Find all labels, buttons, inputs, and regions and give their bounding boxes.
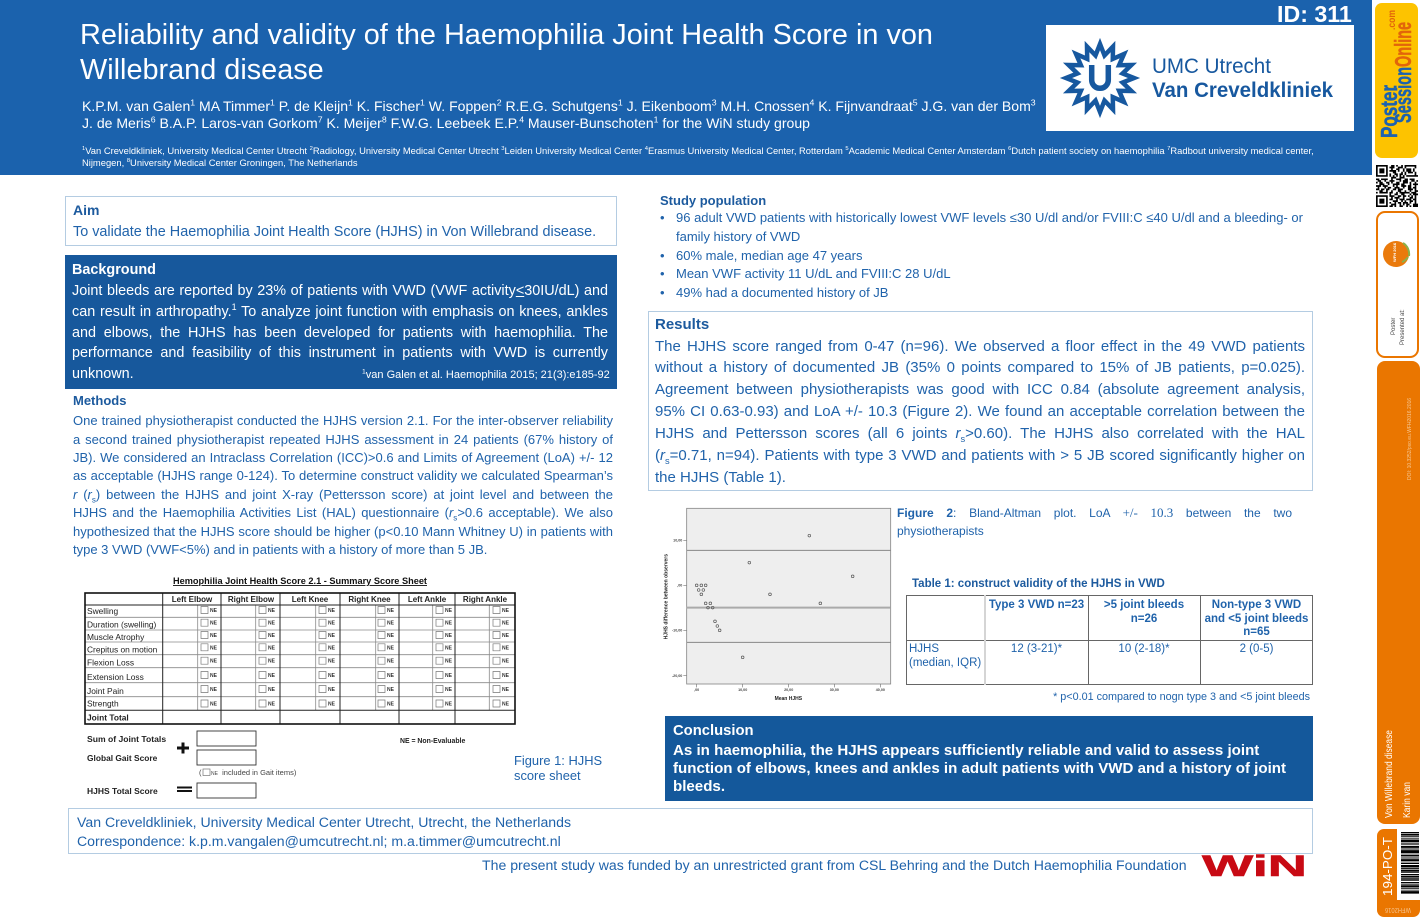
axis tick labels [672,539,885,692]
NE checkboxes: NE [328,702,336,708]
icon: congress logo [1383,241,1409,267]
panel: results: Agreement between physiotherapists was good with ICC 0.84 (absolute agreement analysis, [655,380,1305,398]
panel: results: (rs=0.71, n=94). Patients with type 3 VWD and patients with > 5 JB scored significantly higher on [655,446,1305,466]
panel: background: Joint bleeds are reported by 23% of patients with VWD (VWF activity<30IU/dL) and [72,282,608,298]
score totals: NE included in Gait items) [211,768,297,777]
logo: PosterSessionOnline: Poster [1376,85,1402,138]
NE checkboxes: NE [502,645,510,651]
panel: methods: a second trained physiotherapist repeated HJHS assessment in 24 patients (67% history of [73,432,613,447]
NE checkboxes: NE [387,645,395,651]
affiliations: Nijmegen, 8University Medical Center Groningen, The Netherlands [82,157,358,168]
NE checkboxes: NE [445,645,453,651]
affiliations [82,145,1314,168]
table headers: Type 3 VWD n=23 [989,599,1084,611]
panel: study population: • [660,266,665,281]
NE checkboxes: NE [387,633,395,639]
NE checkboxes: NE [268,645,276,651]
panel: methods: r (rs) between the HJHS and joint X-ray (Pettersson score) at joint level and between the [73,487,613,505]
panel: results: HJHS and Pettersson scores (all 6 joints rs>0.60). The HJHS also correlated with the HAL [655,424,1305,444]
score totals: Global Gait Score [87,753,158,763]
panel: results: without a history of documented JB (35% 0 points compared to 15% of JB patients, p=0.025). [655,358,1305,376]
footer: correspondence [68,808,1313,854]
NE checkboxes: NE [268,608,276,614]
footer: correspondence: Van Creveldkliniek, University Medical Center Utrecht, Utrecht, the Netherlands [77,814,571,830]
row labels: Extension Loss [87,672,144,682]
row labels: Duration (swelling) [87,620,157,630]
panel: study population: family history of VWD [676,229,800,244]
NE checkboxes: NE [328,687,336,693]
axis tick labels: 20,00 [784,688,793,692]
score totals: ( [199,768,202,777]
table headers [989,599,1308,638]
axis tick labels: 10,00 [673,539,682,543]
panel: study population: 96 adult VWD patients with historically lowest VWF levels ≤30 U/dl and/or FVIII:C ≤40 U/dl and a bleeding- or [676,210,1303,225]
footer: correspondence: Correspondence: k.p.m.vangalen@umcutrecht.nl; m.a.timmer@umcutrecht.nl [77,833,561,849]
NE checkboxes: NE [445,673,453,679]
panel: presented at: Presented at: [1400,309,1406,345]
NE checkboxes [201,606,510,708]
figure 1 caption: score sheet [514,768,581,783]
panel: presented at [1377,212,1418,357]
panel: methods: hypothesized that the HJHS score should be higher (p<0.10 Mann Whitney U) in patients with [73,524,613,539]
title: Willebrand disease [80,54,324,86]
NE checkboxes: NE [210,645,218,651]
table title: Table 1: construct validity of the HJHS in VWD [912,578,1165,590]
authors [82,97,1036,131]
table headers: Non-type 3 VWD [1212,599,1301,611]
axis tick labels: ,00 [677,584,682,588]
panel: study population: • [660,248,665,263]
column headers: Right Ankle [463,595,508,604]
panel: study population: 60% male, median age 47 years [676,248,862,263]
logo: PosterSessionOnline: Session [1390,67,1416,123]
panel: conclusion: bleeds. [673,778,725,795]
NE checkboxes: NE [502,621,510,627]
NE checkboxes: NE [210,621,218,627]
axis tick labels: 40,00 [876,688,885,692]
row labels: Flexion Loss [87,658,134,668]
NE checkboxes: NE [328,621,336,627]
panel: methods: type 3 VWD (VWF<5%) and in patients with a history of more than 5 JB. [73,542,487,557]
panel: poster number and barcode: 194-PO-T [1381,837,1395,896]
column headers: Left Elbow [172,595,213,604]
panel: results [648,311,1313,491]
chart: Bland-Altman plot: HJHS difference between observers [663,554,669,639]
panel: study population: • [660,285,665,300]
row labels: Swelling [87,606,119,616]
table body: 12 (3-21)* [1011,643,1062,655]
NE checkboxes: NE [210,702,218,708]
panel: study population: • [660,210,665,225]
panel: methods: JB). We considered an Intraclass Correlation (ICC)>0.6 and Limits of Agreement (LoA) +/- 12 [73,450,613,465]
NE checkboxes: NE [210,673,218,679]
panel: methods: Methods [73,393,126,408]
panel: background: and elbows, the HJHS has been developed for patients with haemophilia. The [72,324,608,340]
limit lines [687,550,891,642]
table headers: >5 joint bleeds [1104,599,1184,611]
table body [909,643,1273,669]
panel: conclusion [665,716,1313,801]
logo: PosterSessionOnline [1375,3,1418,158]
authors: K.P.M. van Galen1 MA Timmer1 P. de Kleijn1 K. Fischer1 W. Foppen2 R.E.G. Schutgens1 J. Eikenboom3 M.H. Cnossen4 K. Fijnvandraat5 J.G. van der Bom3 [82,97,1036,114]
plot area [687,508,891,684]
NE checkboxes: NE [445,702,453,708]
row labels: Strength [87,698,119,708]
panel: poster metadata strip: Karin van [1402,782,1413,818]
panel: study population [660,193,1303,300]
table headers: and <5 joint bleeds [1205,612,1308,624]
axis tick labels: -10,00 [672,629,682,633]
panel: study population: Mean VWF activity 11 U/dL and FVIII:C 28 U/dL [676,266,951,281]
icon: sunburst [1066,44,1134,112]
column headers: Right Knee [348,595,391,604]
NE checkboxes: NE [445,687,453,693]
panel: methods [73,393,613,557]
figure 1 caption [514,753,602,783]
NE checkboxes: NE [445,621,453,627]
table body: 2 (0-5) [1240,643,1273,655]
score totals [87,731,465,798]
NE checkboxes: NE [268,702,276,708]
score grid [85,593,515,724]
NE checkboxes: NE [387,621,395,627]
panel: results: Results [655,316,709,332]
panel: study population: Study population [660,193,766,208]
panel: background: performance and feasibility of this instrument in patients with VWD is currently [72,344,608,360]
NE checkboxes: NE [445,659,453,665]
panel: background [65,255,617,389]
panel: poster metadata strip: DOI: 10.3252/pso.eu.WFH2016.2016 [1407,398,1413,480]
score totals: NE = Non-Evaluable [400,738,465,745]
NE checkboxes: NE [328,608,336,614]
NE checkboxes: NE [445,633,453,639]
icon: congress logo: WFH 2016 [1392,242,1397,262]
NE checkboxes: NE [387,687,395,693]
row labels [87,606,158,722]
NE checkboxes: NE [328,659,336,665]
NE checkboxes: NE [268,621,276,627]
NE checkboxes: NE [387,702,395,708]
NE checkboxes: NE [268,659,276,665]
table headers: n=26 [1131,612,1157,624]
panel: aim [65,196,617,246]
column headers: Left Knee [292,595,329,604]
panel: poster metadata strip: Von Willebrand disease [1384,730,1395,818]
NE checkboxes: NE [210,687,218,693]
row labels: Joint Pain [87,686,124,696]
figure: HJHS score sheet [84,576,516,798]
NE checkboxes: NE [268,633,276,639]
table footnote: * p<0.01 compared to nogn type 3 and <5 joint bleeds [1053,691,1310,703]
NE checkboxes: NE [210,633,218,639]
axis ticks [683,540,880,687]
panel: methods: HJHS and the Haemophilia Activities List (HAL) questionnaire (rs>0.6 acceptable). We also [73,505,613,523]
title [80,19,933,86]
column headers [172,595,508,604]
score totals: Sum of Joint Totals [87,734,166,744]
logo text [1152,55,1333,102]
table headers: n=65 [1243,626,1270,638]
title: Reliability and validity of the Haemophilia Joint Health Score in von [80,19,933,51]
authors: J. de Meris6 B.A.P. Laros-van Gorkom7 K. Meijer8 F.W.G. Leebeek E.P.4 Mauser-Bunschoten1 for the WiN study group [82,114,810,131]
axis tick labels: 10,00 [738,688,747,692]
panel: background: unknown. [72,366,134,382]
score totals: HJHS Total Score [87,786,158,796]
column headers: Left Ankle [408,595,447,604]
axis tick labels: 30,00 [830,688,839,692]
panel: poster metadata strip [1377,361,1420,824]
figure 2 caption: physiotherapists [897,524,984,538]
NE checkboxes: NE [502,673,510,679]
NE checkboxes: NE [210,659,218,665]
panel: methods: One trained physiotherapist conducted the HJHS version 2.1. For the inter-observer reliability [73,413,613,428]
NE checkboxes: NE [502,702,510,708]
NE checkboxes: NE [445,608,453,614]
logo: UMC Utrecht Van Creveldkliniek [1046,25,1354,131]
NE checkboxes: NE [328,633,336,639]
logo: PosterSessionOnline: .com [1387,10,1398,30]
NE checkboxes: NE [387,659,395,665]
barcode [1401,832,1419,894]
axis tick labels: -20,00 [672,674,682,678]
table body: HJHS [909,643,939,655]
panel: presented at: Poster [1391,318,1397,335]
table 1 [906,595,1313,685]
panel: aim: Aim [73,202,99,218]
affiliations: 1Van Creveldkliniek, University Medical Center Utrecht 2Radiology, University Medical Center Utrecht 3Leiden University Medical Center 4Erasmus University Medical Center, Rotterdam 5Academic Medical Center Amsterdam 6Dutch patient society on haemophilia 7Radbout university medical center, [82,145,1314,156]
panel: aim: To validate the Haemophilia Joint Health Score (HJHS) in Von Willebrand disease. [73,224,596,240]
header band [0,0,1372,175]
table body: 10 (2-18)* [1118,643,1170,655]
panel: methods: as acceptable (HJHS range 0-124). To determine construct validity we calculated Spearman’s [73,468,613,483]
panel: study population: 49% had a documented history of JB [676,285,888,300]
row labels: Muscle Atrophy [87,632,145,642]
figure 2 caption [897,505,1292,538]
NE checkboxes: NE [210,608,218,614]
NE checkboxes: NE [328,645,336,651]
data points [695,534,854,659]
sheet title: Hemophilia Joint Health Score 2.1 - Summary Score Sheet [173,576,427,586]
panel: conclusion: Conclusion [673,723,754,739]
figure 2 caption: Figure 2: Bland-Altman plot. LoA +/- 10.3 between the two [897,505,1292,520]
panel: conclusion: function of elbows, knees and ankles in adult patients with VWD and a history of joint [673,760,1286,777]
row labels: Crepitus on motion [87,644,158,654]
panel: results: the HJHS (Table 1). [655,468,786,486]
NE checkboxes: NE [328,673,336,679]
NE checkboxes: NE [502,687,510,693]
axis titles: Mean HJHS [775,696,803,702]
panel: poster number and barcode [1377,829,1420,917]
panel: conclusion: As in haemophilia, the HJHS appears sufficiently reliable and valid to assess joint [673,742,1259,759]
panel: poster number and barcode: WFH2016 [1385,906,1411,913]
QR code [1376,165,1418,207]
NE checkboxes: NE [268,687,276,693]
axis tick labels: ,00 [694,688,699,692]
panel: results: 95% CI 0.63-0.93) and LoA +/- 10.3 (Figure 2). We found an acceptable correlation between the [655,402,1305,420]
chart: Bland-Altman plot [663,508,892,702]
column headers: Right Elbow [228,595,275,604]
panel: background: 1van Galen et al. Haemophilia 2015; 21(3):e185-92 [362,368,610,381]
logo text: Van Creveldkliniek [1152,79,1333,102]
logo text: UMC Utrecht [1152,55,1271,78]
poster id: ID: 311 [1277,1,1352,27]
NE checkboxes: NE [268,673,276,679]
panel: background: Background [72,262,156,278]
panel: background: can result in arthropathy.1 To analyze joint function with emphasis on knees, ankles [72,302,608,320]
NE checkboxes: NE [387,608,395,614]
row labels: Joint Total [87,712,129,722]
NE checkboxes: NE [502,633,510,639]
sidebar [1375,3,1420,917]
panel: results: The HJHS score ranged from 0-47 (n=96). We observed a floor effect in the 49 VWD patients [655,338,1305,354]
figure 1 caption: Figure 1: HJHS [514,753,602,768]
funding statement: The present study was funded by an unrestricted grant from CSL Behring and the Dutch Haemophilia Foundation [482,857,1187,873]
NE checkboxes: NE [502,608,510,614]
table body: (median, IQR) [909,657,981,669]
NE checkboxes: NE [387,673,395,679]
NE checkboxes: NE [502,659,510,665]
